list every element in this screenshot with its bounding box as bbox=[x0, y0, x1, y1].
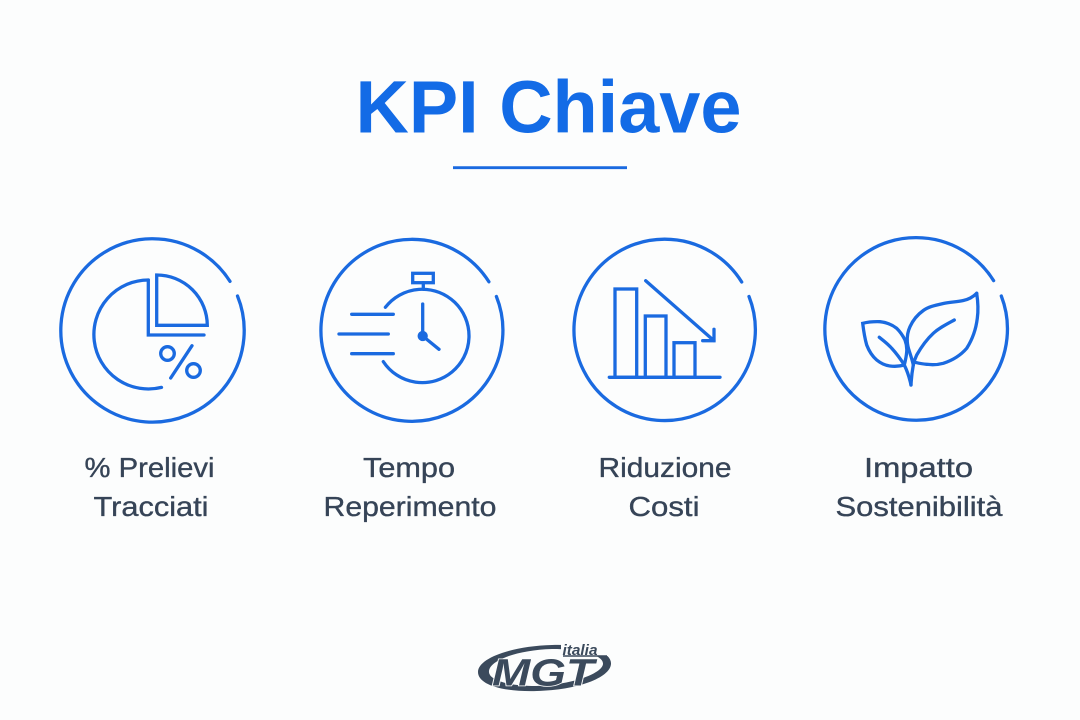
title: KPI Chiave bbox=[356, 66, 742, 148]
panel: percent tracked bbox=[61, 239, 244, 522]
panel: retrieval time bbox=[321, 239, 503, 522]
label: sustainability impact: Sostenibilità bbox=[836, 491, 1003, 522]
logo: MGT Italia: italia bbox=[562, 642, 598, 659]
title underline bbox=[453, 166, 627, 169]
label: percent tracked: Tracciati bbox=[94, 491, 208, 522]
icon: descending bar chart bbox=[574, 239, 755, 421]
icon: leaves bbox=[825, 238, 1007, 420]
logo: MGT Italia bbox=[478, 640, 613, 694]
label: cost reduction: Costi bbox=[628, 491, 700, 522]
icon: pie chart with percent bbox=[61, 239, 244, 422]
icon: stopwatch bbox=[321, 239, 503, 421]
label: sustainability impact: Impatto bbox=[864, 452, 973, 483]
label: retrieval time: Tempo bbox=[363, 452, 455, 483]
panel: cost reduction bbox=[574, 239, 755, 522]
label: cost reduction: Riduzione bbox=[598, 452, 732, 483]
logo: MGT Italia: MGT bbox=[492, 652, 597, 694]
label: retrieval time: Reperimento bbox=[324, 491, 496, 522]
panel: sustainability impact bbox=[825, 238, 1007, 522]
label: percent tracked: % Prelievi bbox=[84, 452, 214, 483]
